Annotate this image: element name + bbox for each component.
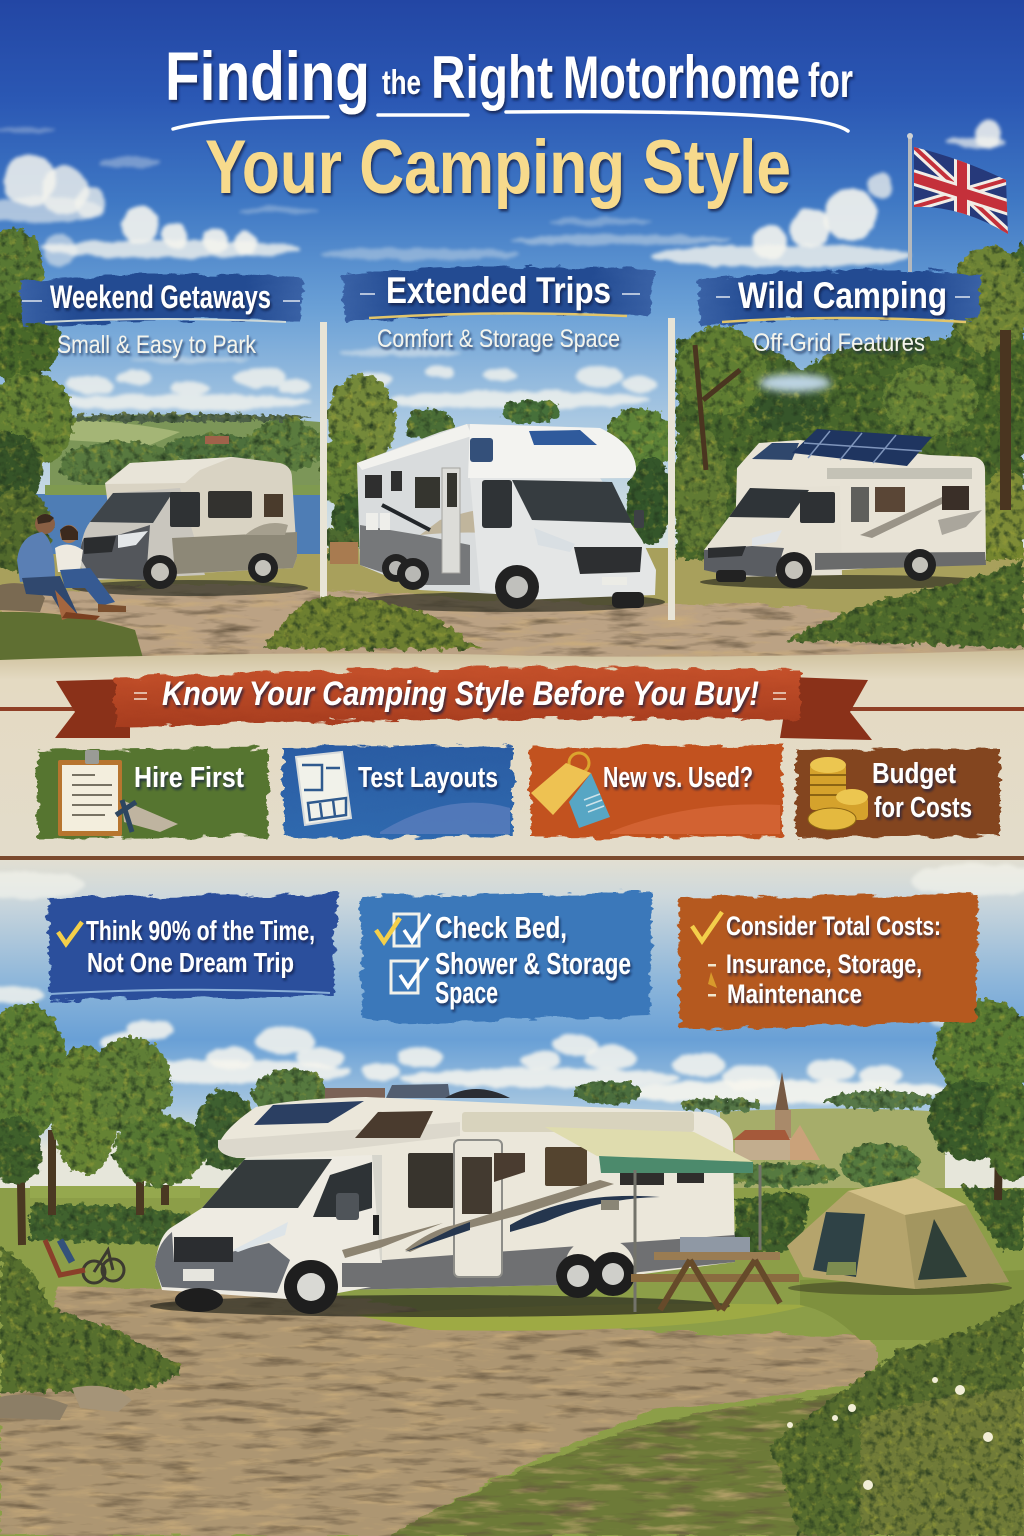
bicycles and chair [45, 1240, 124, 1283]
callout: think 90 percent [48, 894, 336, 1000]
title line one: the [382, 64, 421, 102]
heading banner: wild camping [698, 270, 982, 357]
people sitting on a rock [0, 514, 126, 620]
callout: consider total costs: Consider Total Costs: [726, 911, 941, 941]
scenic ground strip for the three panels [0, 548, 1024, 665]
graphics swooshes [342, 1223, 443, 1258]
panel dividers [320, 318, 675, 620]
panel: weekend getaways scene [0, 228, 323, 620]
title [165, 38, 853, 210]
tile: hire first [37, 748, 268, 838]
motorhome: solar-panel camper [700, 429, 990, 589]
crates [330, 542, 358, 564]
tent [787, 1178, 1012, 1295]
tile: budget for costs [796, 748, 1000, 838]
icon: union flag on pole [907, 133, 1010, 272]
title line one: Motorhome [563, 44, 800, 111]
heading banner: weekend getaways: Weekend Getaways [50, 279, 271, 315]
roof equipment [325, 1084, 510, 1100]
dirt path [0, 1287, 878, 1536]
ribbon: know your camping style: Know Your Camping Style Before You Buy! [162, 675, 759, 713]
tile: hire first: Hire First [134, 762, 244, 794]
heading banner: extended trips [342, 266, 654, 353]
panel: wild camping scene [672, 240, 1024, 589]
foreground shrubs and flowers [0, 1246, 1024, 1536]
top sky background [0, 0, 1024, 560]
village church [733, 1072, 820, 1160]
icon: check mark and bullets [692, 912, 722, 996]
callout: check bed [360, 892, 652, 1024]
icon: clipboard and keys [58, 750, 178, 836]
title line one: Finding [165, 38, 370, 115]
background trees [321, 374, 674, 560]
ribbon: know your camping style [55, 668, 872, 740]
awning [462, 1112, 760, 1312]
callout: think 90 percent: Not One Dream Trip [87, 947, 294, 978]
callout: think 90 percent: Think 90% of the Time, [86, 915, 315, 946]
callout: check bed: Space [435, 975, 498, 1010]
icon: check boxes [376, 914, 430, 993]
subheading: Small & Easy to Park [57, 331, 256, 359]
lower scene sky [0, 860, 1024, 1200]
main motorhome [150, 1084, 760, 1317]
woodland backdrop [672, 240, 1024, 560]
tree line lower [0, 1000, 1024, 1255]
callout: check bed: Check Bed, [435, 910, 567, 945]
icon: price tags [531, 753, 610, 828]
heading banner: extended trips: Extended Trips [386, 270, 611, 311]
wheels [284, 1260, 338, 1314]
motorhome: small campervan [72, 457, 308, 596]
tile: test layouts: Test Layouts [358, 762, 498, 794]
distant trees [30, 1069, 1024, 1255]
windows [254, 1101, 364, 1125]
near trees left [20, 1120, 165, 1245]
callout: check bed: Shower & Storage [435, 946, 631, 981]
cab [155, 1155, 382, 1300]
tile: test layouts [283, 745, 513, 838]
tile: new vs used: New vs. Used? [603, 762, 753, 794]
lake [25, 494, 320, 554]
foreground bushes of the panels [265, 560, 1024, 650]
flowers [787, 1377, 993, 1490]
heading banner: wild camping: Wild Camping [738, 275, 947, 316]
parchment band [0, 650, 1024, 862]
panel sky clouds [50, 349, 658, 410]
sky gap [759, 374, 831, 392]
tile: budget for costs: Budget [872, 758, 956, 790]
picnic table [631, 1237, 799, 1310]
title line one: for [808, 55, 853, 108]
near trees right [998, 1080, 1000, 1200]
motorhome: large coachbuilt [355, 424, 665, 612]
callout: consider total costs [678, 894, 978, 1030]
grass patches [355, 1304, 810, 1331]
lower scene landscape [0, 1108, 1024, 1536]
panel: extended trips scene [321, 374, 674, 612]
tree: left edge [0, 228, 74, 572]
heading banner: weekend getaways [20, 274, 303, 359]
icon: floor plan [296, 752, 351, 825]
distant hills [50, 414, 323, 496]
tile: new vs used [530, 745, 782, 838]
callout: consider total costs: Insurance, Storage, [726, 949, 922, 979]
subheading: Comfort & Storage Space [377, 325, 620, 353]
title line one: Right [431, 44, 553, 111]
title line two: Your Camping Style [205, 125, 791, 210]
tree trunks [695, 345, 740, 470]
subheading: Off-Grid Features [753, 329, 925, 357]
icon: check mark [58, 922, 82, 944]
distant fields [720, 1108, 945, 1200]
rocks [0, 1395, 68, 1420]
coach body [218, 1097, 735, 1290]
tile: budget for costs: for Costs [874, 792, 972, 824]
icon: coin stacks [808, 757, 868, 830]
callout: consider total costs: Maintenance [727, 979, 862, 1009]
title line one [165, 38, 853, 115]
